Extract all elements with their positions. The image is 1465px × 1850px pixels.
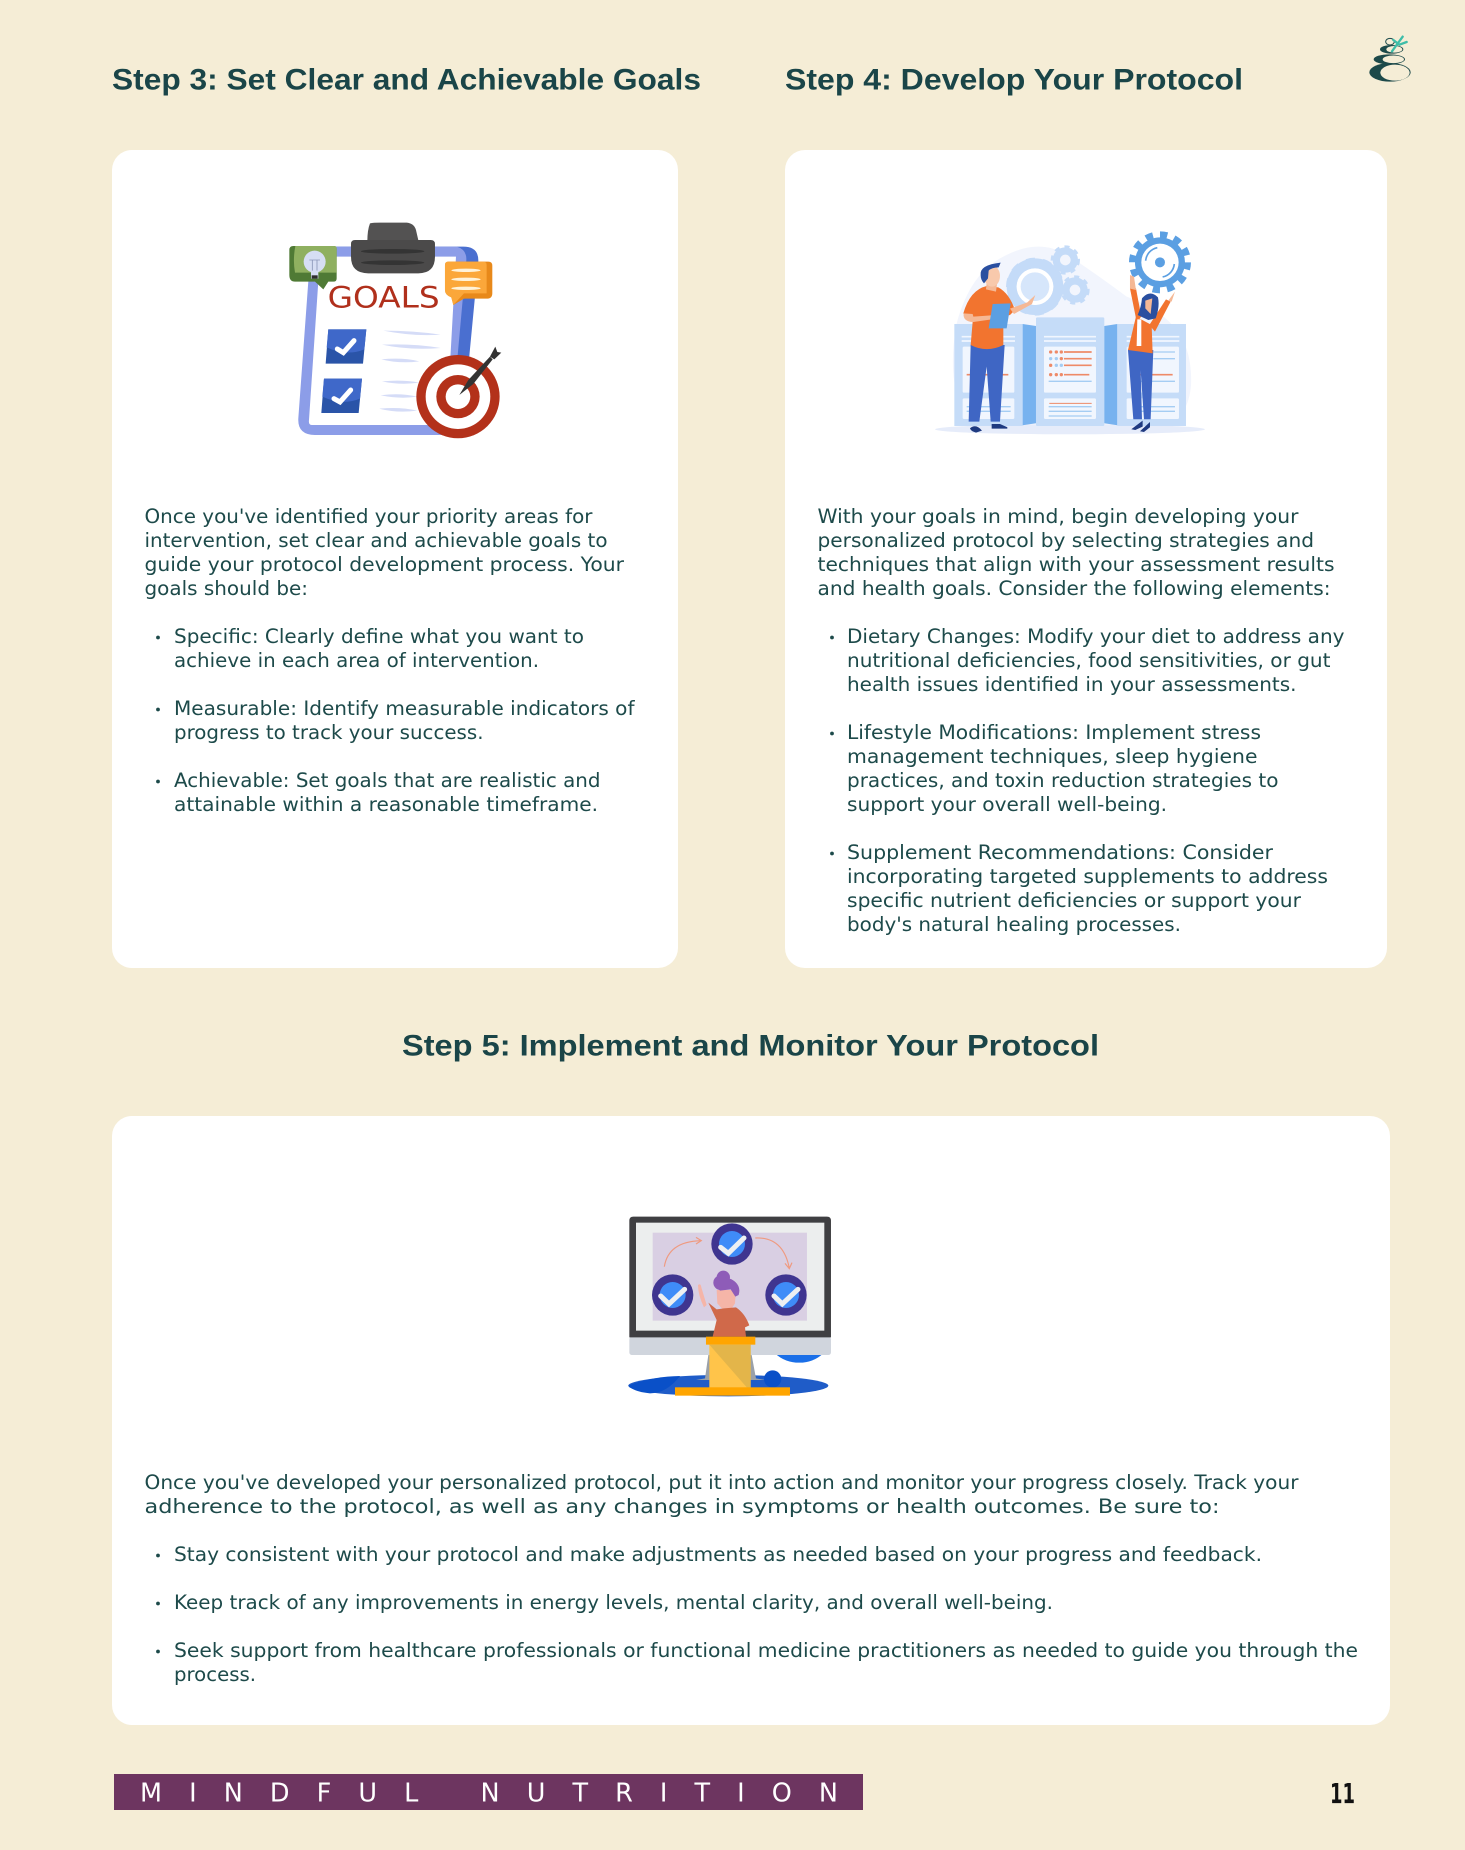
text block: step 5: process.: [174, 1663, 256, 1686]
heading: step 5: Step 5: Implement and Monitor Your Protocol: [402, 1030, 1099, 1062]
text block: step 3: [144, 505, 636, 816]
text block: step 4: health issues identified in your assessments.: [847, 673, 1296, 696]
page number: 11: [1330, 1777, 1355, 1810]
text block: step 3: attainable within a reasonable timeframe.: [174, 793, 598, 816]
text block: step 4: techniques that align with your assessment results: [818, 553, 1334, 576]
text block: step 4: Dietary Changes: Modify your diet to address any: [847, 625, 1345, 648]
text block: step 4: With your goals in mind, begin developing your: [818, 505, 1299, 528]
text block: step 3: goals should be:: [144, 577, 308, 600]
text block: step 3: Measurable: Identify measurable indicators of: [174, 697, 636, 720]
text block: step 5: Seek support from healthcare professionals or functional medicine practitioners as needed to guide you through the: [174, 1639, 1358, 1662]
illustration: goals clipboard: [289, 223, 501, 438]
figure: presenter at podium: [675, 1271, 790, 1396]
text block: step 5: Keep track of any improvements in energy levels, mental clarity, and overall well-being.: [174, 1591, 1053, 1614]
panel: step 5 card: [112, 1116, 1390, 1725]
card background: [112, 1116, 1390, 1725]
panel: step 4 card: [785, 150, 1387, 968]
text block: step 3: Specific: Clearly define what you want to: [174, 625, 584, 648]
checkbox two: [321, 379, 362, 413]
figure: man with tablet: [963, 263, 1035, 433]
illustration: monitor with presenter: [628, 1217, 831, 1396]
text block: step 4: and health goals. Consider the following elements:: [818, 577, 1330, 600]
text block: step 5: adherence to the protocol, as well as any changes in symptoms or health outcomes. Be sure to:: [144, 1495, 1220, 1518]
icon: stacked stones logo: [1369, 37, 1411, 82]
large blue gear: [1132, 235, 1188, 290]
text block: step 4: Supplement Recommendations: Consider: [847, 841, 1274, 864]
text block: step 4: [818, 505, 1345, 936]
icon: orange speech bubble: [445, 262, 492, 305]
icon: target with dart: [416, 347, 501, 438]
light gears: [1008, 247, 1088, 313]
text block: step 4: nutritional deficiencies, food sensitivities, or gut: [847, 649, 1331, 672]
text: GOALS: GOALS: [328, 280, 440, 314]
text block: step 4: management techniques, sleep hygiene: [847, 745, 1258, 768]
text block: step 3: intervention, set clear and achievable goals to: [144, 529, 608, 552]
text block: step 4: incorporating targeted supplements to address: [847, 865, 1328, 888]
check badge top: [711, 1223, 753, 1265]
heading: step 3: Step 3: Set Clear and Achievable Goals: [112, 64, 701, 96]
illustration: protocol team with gears: [935, 235, 1205, 434]
check badge right: [765, 1274, 807, 1316]
text block: step 4: personalized protocol by selecting strategies and: [818, 529, 1314, 552]
check badge left: [652, 1274, 693, 1316]
arrows: [664, 1237, 792, 1269]
footer banner: MINDFUL NUTRITION: [140, 1778, 838, 1808]
text block: step 3: guide your protocol development process. Your: [144, 553, 625, 576]
text block: step 5: Stay consistent with your protocol and make adjustments as needed based on your progress and feedback.: [174, 1543, 1262, 1566]
text block: step 4: support your overall well-being.: [847, 793, 1167, 816]
text block: step 4: body's natural healing processes.: [847, 913, 1181, 936]
document panels: [954, 317, 1186, 426]
text block: step 4: Lifestyle Modifications: Implement stress: [847, 721, 1261, 744]
figure: woman lifting gear: [1128, 275, 1175, 432]
card background: [112, 150, 678, 968]
text block: step 4: specific nutrient deficiencies or support your: [847, 889, 1302, 912]
text block: step 3: progress to track your success.: [174, 721, 484, 744]
text block: step 4: practices, and toxin reduction strategies to: [847, 769, 1278, 792]
card background: [785, 150, 1387, 968]
text block: step 5: Once you've developed your personalized protocol, put it into action and monitor your progress closely. Track your: [144, 1471, 1299, 1494]
heading: step 4: Step 4: Develop Your Protocol: [785, 64, 1243, 96]
text block: step 3: achieve in each area of intervention.: [174, 649, 539, 672]
checkbox one: [326, 329, 366, 364]
icon: lightbulb bubble: [289, 246, 337, 289]
text block: step 3: Once you've identified your priority areas for: [144, 505, 593, 528]
panel: step 3 card: [112, 150, 678, 968]
text block: step 5: [144, 1471, 1358, 1686]
text block: step 3: Achievable: Set goals that are realistic and: [174, 769, 600, 792]
